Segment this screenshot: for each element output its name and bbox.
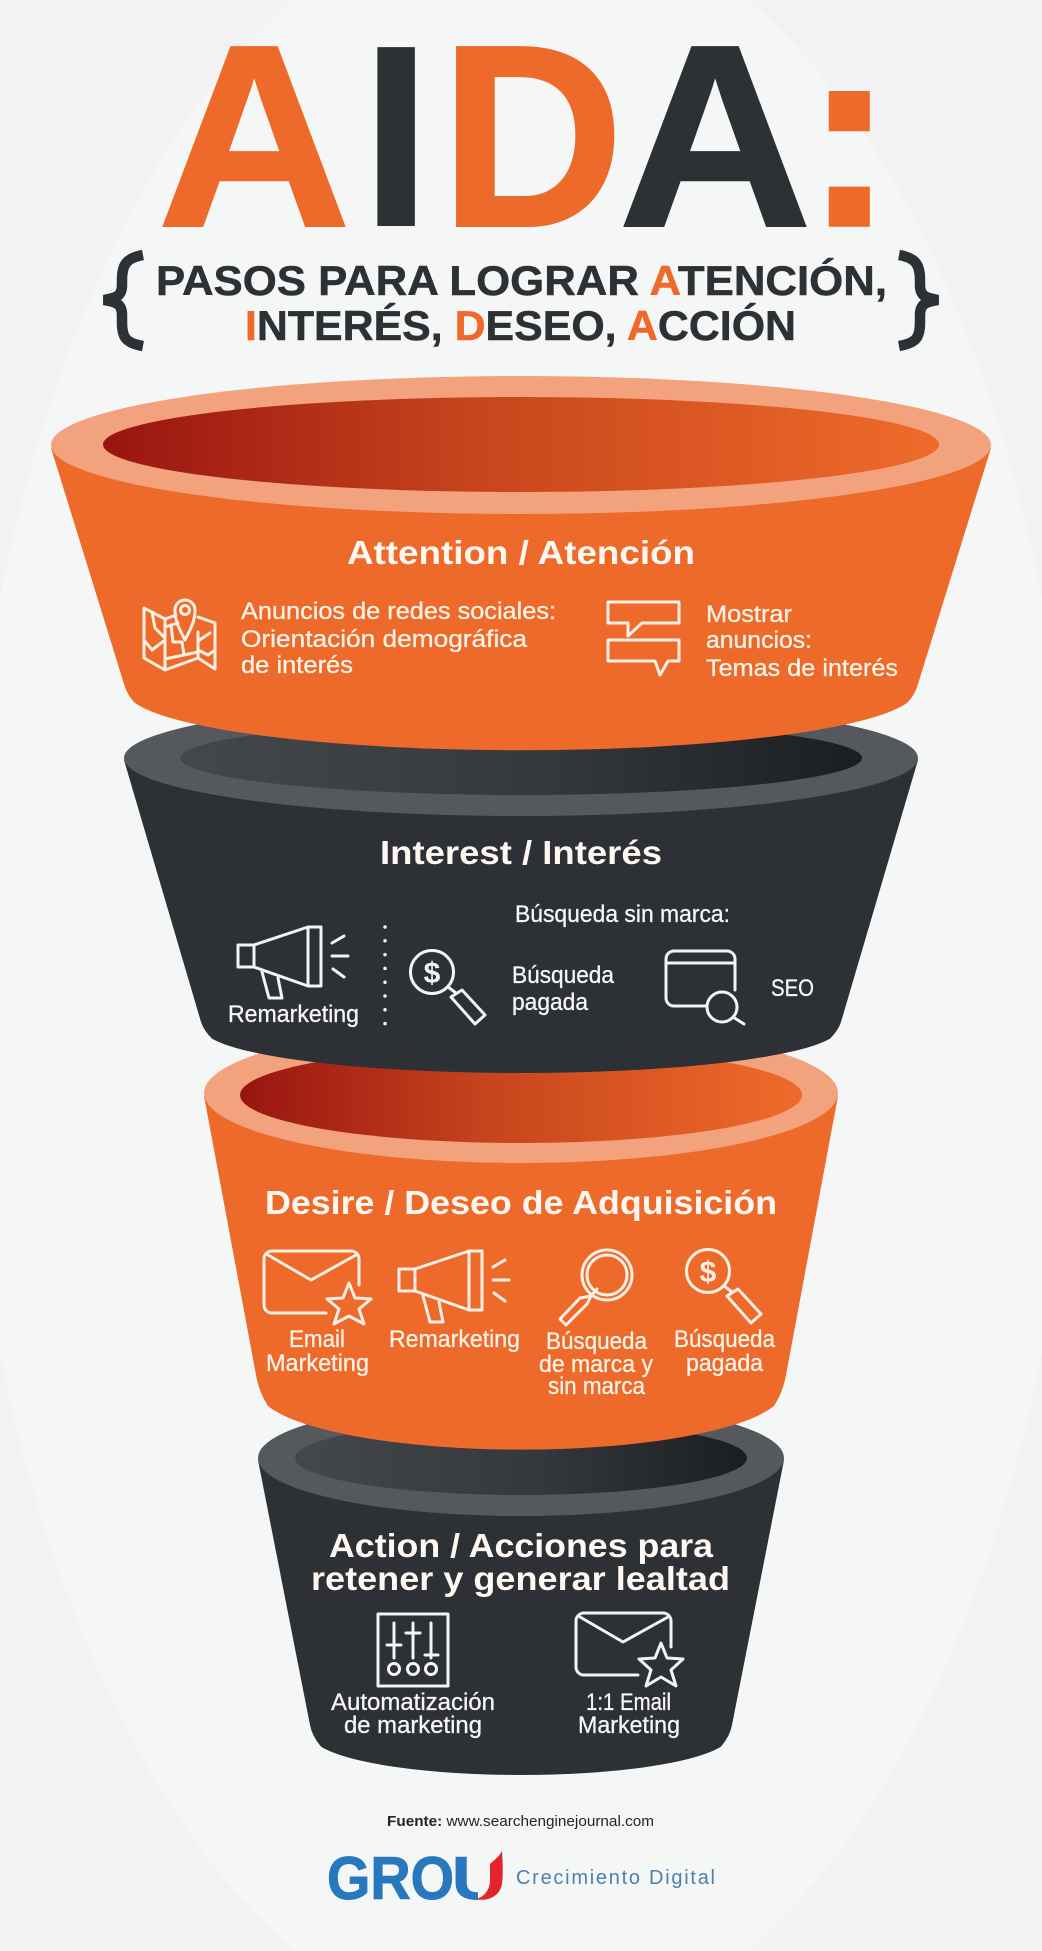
text: mostrar anuncios: Mostrar [706, 601, 792, 628]
heading: interest: Interest / Interés [380, 834, 662, 871]
text: busqueda de marca y sin marca [539, 1328, 653, 1400]
funnel opening [103, 397, 939, 492]
text: busqueda pagada [674, 1326, 776, 1377]
icon: dollar magnifier [410, 950, 485, 1024]
funnel rim [204, 1023, 838, 1163]
funnel body [258, 1460, 784, 1775]
text: marketing: Marketing [578, 1712, 680, 1739]
heading: action: Action / Acciones para [329, 1527, 714, 1564]
text: mostrar anuncios: Temas de interés [706, 655, 898, 682]
funnel body [204, 1096, 838, 1450]
icon: map with pin [144, 600, 215, 670]
funnel opening [240, 1047, 802, 1143]
icon: megaphone [238, 927, 348, 998]
text: anuncios de redes sociales: de interés [241, 652, 353, 679]
heading: desire: Desire / Deseo de Adquisición [265, 1184, 777, 1221]
funnel 1: attention [51, 376, 991, 750]
text: 1:1 email: 1:1 Email [586, 1689, 671, 1716]
funnel body [51, 448, 991, 750]
icon: right brace [899, 255, 938, 346]
subtitle with braces [104, 255, 938, 349]
icon: magnifier [560, 1250, 632, 1325]
icon: email star [264, 1251, 371, 1324]
text: busqueda pagada: Búsqueda [512, 962, 615, 989]
funnel rim [124, 700, 918, 816]
funnel 4: action [258, 1400, 784, 1775]
funnel rim [51, 376, 991, 514]
title: AIDA [157, 0, 893, 282]
funnel opening [295, 1421, 747, 1495]
text: remarketing: Remarketing [228, 1001, 359, 1028]
title: AIDA: I [360, 0, 432, 282]
funnel opening [180, 721, 862, 795]
icon: browser search [666, 951, 744, 1024]
dotted divider [383, 927, 387, 1024]
text: busqueda de marca y sin marca: de marca y [539, 1351, 653, 1378]
text: busqueda pagada: pagada [512, 989, 589, 1016]
text: mostrar anuncios: anuncios: [706, 627, 812, 654]
icon: dollar magnifier: $ [424, 957, 441, 990]
text: automatizacion: Automatización [331, 1689, 495, 1716]
source line: Fuente: www.searchenginejournal.com [387, 1813, 654, 1830]
icon: megaphone [399, 1251, 509, 1322]
text: busqueda de marca y sin marca: Búsqueda [546, 1328, 648, 1355]
funnel 2: interest [124, 700, 918, 1073]
text: busqueda de marca y sin marca: sin marca [548, 1373, 646, 1400]
funnel rim [258, 1400, 784, 1516]
icon: dollar magnifier [686, 1250, 761, 1323]
icon: sliders [378, 1614, 448, 1686]
icon: dollar magnifier: $ [700, 1256, 717, 1289]
icon: speech bubbles [608, 602, 679, 675]
subtitle line 2: INTERÉS, DESEO, ACCIÓN [245, 301, 796, 349]
text: busqueda sin marca: Búsqueda sin marca: [515, 901, 730, 928]
text: marketing: Marketing [266, 1350, 369, 1377]
logo: GROU [328, 1851, 714, 1900]
subtitle line 1: PASOS PARA LOGRAR ATENCIÓN, [156, 256, 887, 304]
text: remarketing: Remarketing [389, 1326, 520, 1353]
logo wordmark GRO: GRO [327, 1845, 454, 1912]
text: anuncios de redes sociales: Anuncios de redes sociales: [241, 598, 556, 625]
logo swoosh [476, 1851, 503, 1900]
funnel 3: desire [204, 1023, 838, 1450]
heading: attention: Attention / Atención [347, 534, 695, 571]
text: de marketing: de marketing [344, 1712, 482, 1739]
text: seo: SEO [771, 975, 814, 1002]
text: busqueda pagada: pagada [686, 1350, 764, 1377]
logo wordmark U: U [452, 1845, 502, 1912]
logo tagline: Crecimiento Digital [516, 1867, 715, 1889]
text: anuncios de redes sociales [241, 598, 556, 679]
text: mostrar anuncios [706, 601, 898, 682]
text: busqueda pagada: Búsqueda [674, 1326, 776, 1353]
text: anuncios de redes sociales: Orientación demográfica [241, 626, 528, 653]
heading line 2: retener y generar lealtad [311, 1560, 730, 1597]
text: busqueda pagada [512, 962, 615, 1016]
icon: left brace [104, 255, 143, 346]
funnel body [124, 760, 918, 1073]
text: email: Email [289, 1326, 345, 1353]
icon: email star [576, 1613, 683, 1686]
